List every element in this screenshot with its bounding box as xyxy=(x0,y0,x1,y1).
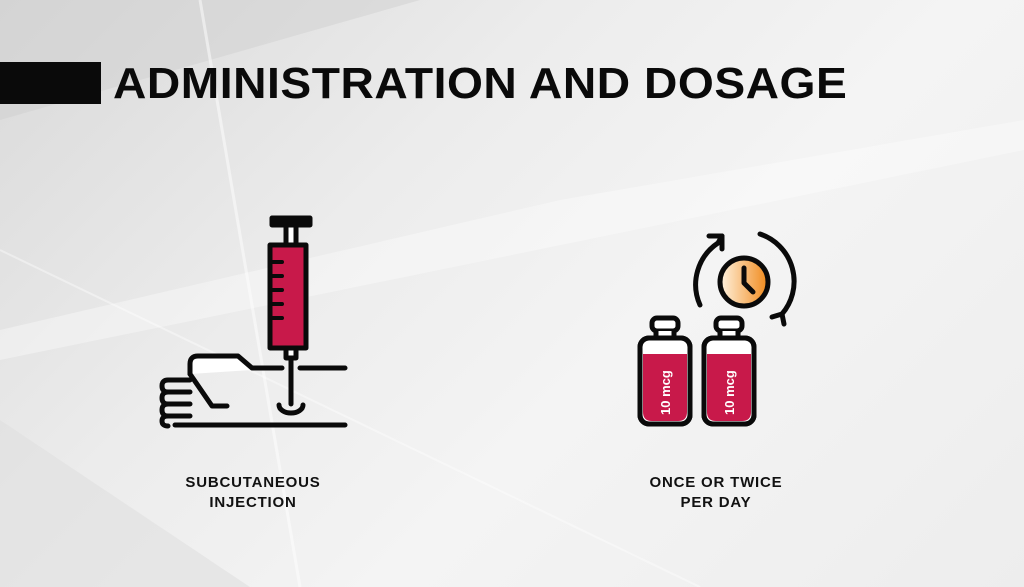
icon: vials with clock: 10 mcg xyxy=(722,370,737,415)
label: once or twice per day: PER DAY xyxy=(681,494,751,511)
label: subcutaneous injection: SUBCUTANEOUS xyxy=(185,474,321,491)
title: ADMINISTRATION AND DOSAGE xyxy=(113,59,847,108)
label: subcutaneous injection xyxy=(185,474,321,511)
title bar xyxy=(0,62,101,104)
label: once or twice per day: ONCE OR TWICE xyxy=(650,474,782,491)
icon: vials with clock: 10 mcg xyxy=(658,370,673,415)
label: subcutaneous injection: INJECTION xyxy=(209,494,297,511)
label: once or twice per day xyxy=(650,474,782,511)
